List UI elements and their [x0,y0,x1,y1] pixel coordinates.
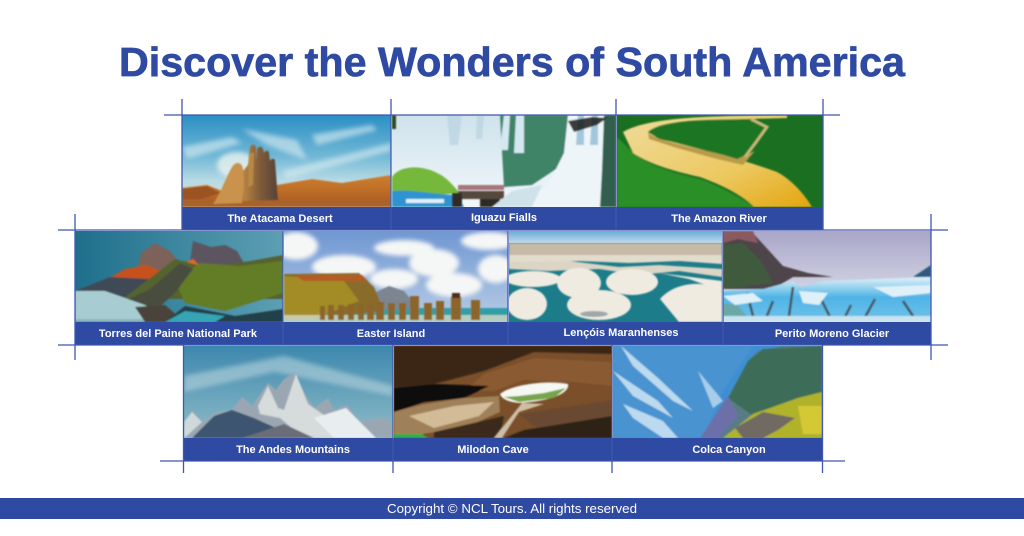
panel: Lençóis Maranhenses [505,231,723,345]
photo: Andes Mountains [184,346,392,438]
photo: Milodon Cave [394,346,612,438]
panel: Colca Canyon [612,346,823,461]
photo: Torres del Paine [76,231,282,322]
photo: Easter Island moai [284,231,508,322]
photo: Lençóis Maranhenses dunes [509,231,722,322]
label bar: Perito Moreno Glacier [723,322,931,345]
label bar: Colca Canyon [612,438,823,461]
label bar: The Atacama Desert: The Atacama Desert [227,213,333,225]
label bar: Easter Island [283,322,508,345]
title: Discover the Wonders of South America [119,39,906,85]
panel: Iguazu Fialls [391,115,616,230]
panel: Torres del Paine National Park [75,231,283,345]
panel: Milodon Cave [393,346,612,461]
label bar: Lençóis Maranhenses [508,322,723,345]
label bar: The Amazon River [616,207,823,230]
label bar: The Amazon River: The Amazon River [671,213,767,225]
photo: Amazon River [617,116,822,207]
label bar: Colca Canyon: Colca Canyon [692,444,766,456]
label bar: Torres del Paine National Park: Torres del Paine National Park [99,328,258,340]
photo: Iguazu Falls [392,116,616,207]
label bar: The Atacama Desert [182,207,391,230]
label bar: The Andes Mountains [184,438,393,461]
panel: The Andes Mountains [184,346,393,461]
label bar: Perito Moreno Glacier: Perito Moreno Glacier [775,328,890,340]
label bar: Iguazu Fialls: Iguazu Fialls [471,212,537,224]
label bar: Lençóis Maranhenses: Lençóis Maranhenses [564,327,678,339]
panel: The Atacama Desert [182,115,391,230]
photo: Perito Moreno Glacier [724,231,930,322]
label bar: The Andes Mountains: The Andes Mountains [236,444,350,456]
label bar: Milodon Cave: Milodon Cave [457,444,529,456]
photo: Atacama Desert hand sculpture [182,116,390,207]
label bar: Iguazu Fialls [391,207,616,230]
label bar: Milodon Cave [393,438,612,461]
label bar: Torres del Paine National Park [75,322,283,345]
panel: The Amazon River [616,115,823,230]
footer bar [0,498,1024,519]
copyright text: Copyright © NCL Tours. All rights reserved [387,501,637,516]
panel: Easter Island [274,231,517,345]
photo: Colca Canyon [613,346,822,438]
label bar: Easter Island: Easter Island [357,328,425,340]
panel: Perito Moreno Glacier [723,231,931,345]
